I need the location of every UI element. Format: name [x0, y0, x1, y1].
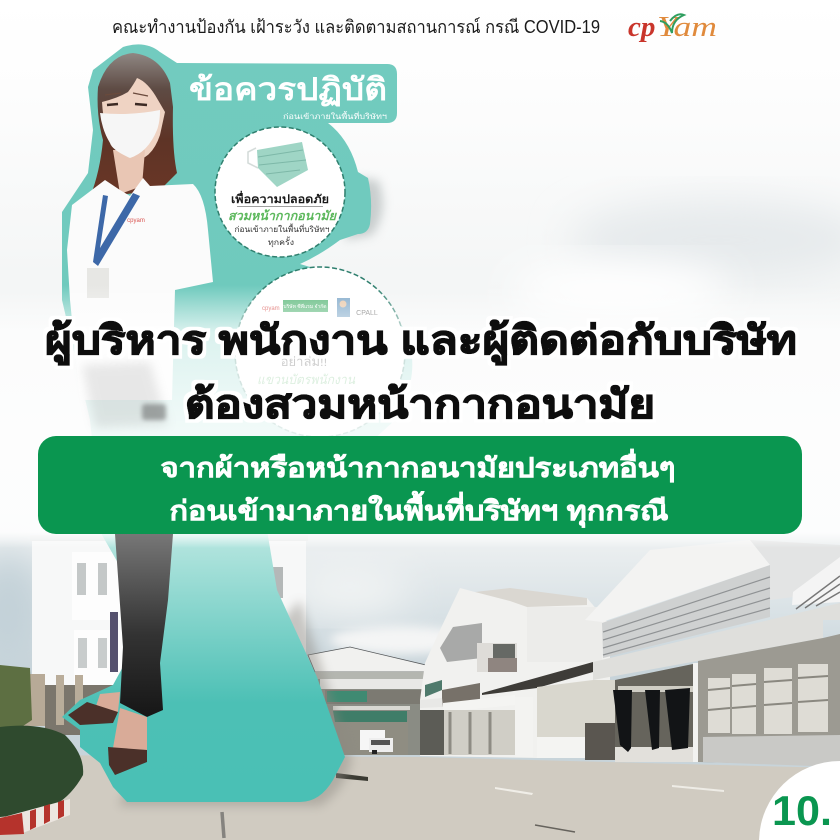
dock doors	[615, 664, 693, 762]
circle card: wear a mask	[215, 127, 345, 257]
circle card: wear employee badge: อย่าลืม!!	[281, 354, 327, 369]
blue lanyard	[93, 193, 140, 266]
woman in white polo and mask	[67, 53, 213, 400]
brows	[105, 93, 148, 96]
page header: คณะทำงานป้องกัน เฝ้าระวัง และติดตามสถานการณ์ กรณี COVID-19	[112, 17, 600, 37]
white veil behind headline	[0, 285, 840, 548]
circle card: wear a mask: เพื่อความปลอดภัย	[231, 190, 329, 206]
headline	[45, 319, 797, 427]
green callout	[38, 436, 802, 534]
louvred wall	[602, 565, 770, 658]
canopy	[482, 662, 593, 695]
page number badge	[759, 761, 840, 840]
bush	[0, 726, 83, 817]
icon: surgical mask	[248, 142, 308, 187]
circle card: wear employee badge: CPALL	[356, 310, 378, 317]
circle card: wear a mask: ทุกครั้ง	[268, 236, 294, 247]
white polo shirt	[67, 178, 213, 400]
main roof	[585, 540, 770, 622]
circle card: wear employee badge	[235, 267, 405, 437]
black trousers	[115, 534, 173, 717]
watch on wrist	[142, 404, 166, 420]
green callout: จากผ้าหรือหน้ากากอนามัยประเภทอื่นๆ	[160, 448, 676, 483]
panel heading: guidelines: ข้อควรปฏิบัติ	[189, 72, 387, 107]
headline: ต้องสวมหน้ากากอนามัย	[185, 383, 655, 427]
page number badge: 10.	[772, 787, 832, 834]
model legs and shoes	[68, 534, 173, 775]
parking stopper	[336, 773, 368, 781]
panel heading: guidelines: ก่อนเข้าภายในพื้นที่บริษัทฯ	[283, 111, 387, 121]
shirt logo: cpyam	[127, 218, 145, 224]
left block	[420, 588, 610, 758]
arm shadow faded	[82, 362, 168, 428]
circle card: wear a mask: ก่อนเข้าภายในพื้นที่บริษัทฯ	[234, 223, 330, 234]
logo: cpram	[628, 11, 717, 43]
hair	[90, 53, 177, 197]
background: white office building	[20, 535, 308, 735]
right wall with dock panels	[698, 634, 840, 765]
circle card: wear a mask: สวมหน้ากากอนามัย	[228, 209, 338, 223]
panel heading: guidelines	[189, 72, 387, 121]
logo: cpram: cp	[628, 11, 655, 43]
shoe rear	[68, 702, 118, 725]
circle card: wear employee badge: แขวนบัตรพนักงาน	[257, 372, 356, 387]
background: large warehouse	[420, 540, 840, 767]
background: ground	[0, 755, 840, 840]
under canopy wall	[537, 680, 615, 758]
truck	[360, 730, 393, 754]
shoe front	[108, 747, 147, 775]
circle card: wear employee badge: cpyam	[262, 306, 280, 312]
background: trees behind building	[0, 665, 32, 730]
green callout: ก่อนเข้ามาภายในพื้นที่บริษัทฯ ทุกกรณี	[170, 490, 668, 528]
curb	[0, 799, 70, 835]
neck	[113, 150, 145, 194]
background: small distant warehouse	[308, 647, 488, 755]
eyes	[107, 104, 147, 105]
face	[102, 78, 165, 161]
ankles	[96, 692, 147, 750]
white face mask	[100, 110, 160, 158]
road markings	[222, 785, 724, 838]
logo: cpram: Yam	[657, 11, 717, 43]
panel: teal standee	[62, 44, 412, 806]
circle card: wear employee badge: บริษัท ซีพีแรม จำกัด	[283, 303, 327, 310]
headline: ผู้บริหาร พนักงาน และผู้ติดต่อกับบริษัท	[45, 319, 797, 365]
page header	[112, 11, 717, 43]
id card	[87, 268, 109, 298]
